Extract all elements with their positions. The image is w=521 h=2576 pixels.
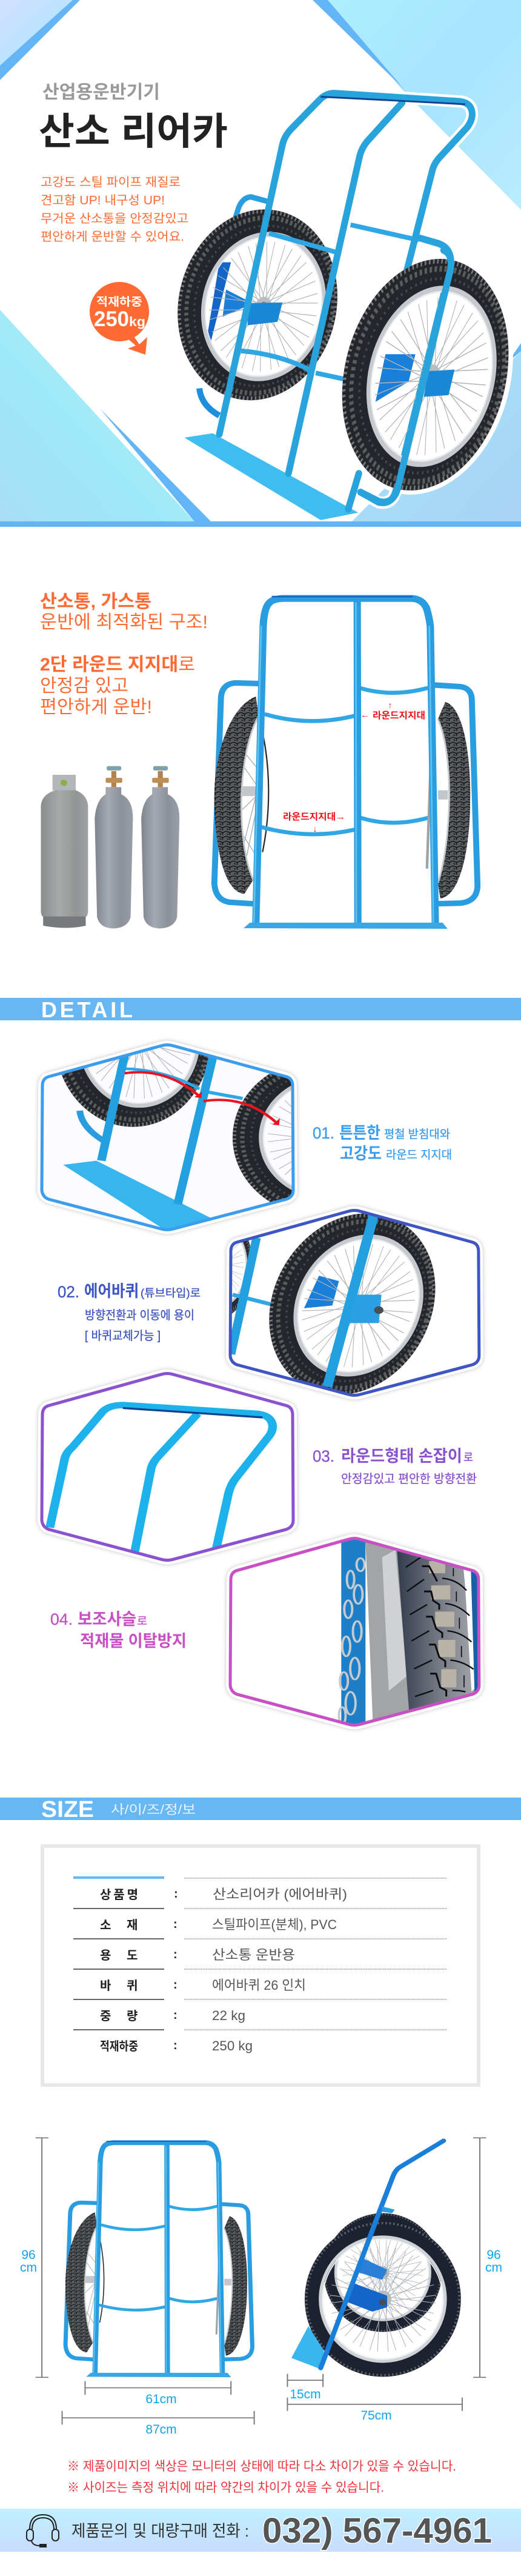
table values: 250 kg [212,2038,253,2053]
illustration: gas cylinders [41,766,179,929]
table labels: 량 [127,2009,138,2023]
heading band: SIZE [0,1797,521,1822]
callout: round support labels: ↓ [313,824,317,834]
text: detail 04: 04. [50,1610,73,1628]
text: detail 01: 튼튼한 [339,1124,380,1142]
text: optimized structure [40,592,208,717]
table labels: 용 [100,1949,111,1962]
text: optimized structure: 산소통, 가스통 [40,592,151,612]
detail panel 03 [42,1374,293,1561]
badge: load capacity 250kg: 250 [94,307,129,331]
text: detail 02: 에어바퀴 [84,1282,139,1300]
table values [212,1887,347,2053]
table values: 에어바퀴 26 인치 [212,1978,306,1993]
dimension labels: 96 [21,2248,36,2262]
table labels: 적재하중 [100,2039,138,2053]
table colons [173,1887,178,2052]
table colons: : [173,2039,178,2052]
heading band: SIZE: SIZE [41,1797,94,1822]
notes [67,2460,456,2495]
dimension labels: cm [20,2261,37,2275]
text: optimized structure: 운반에 최적화된 구조! [40,612,208,632]
table labels: 퀴 [127,1979,138,1993]
product: cart side view [291,2141,459,2375]
product: cart front dimension view [65,2141,252,2377]
table values: 산소리어카 (에어바퀴) [213,1887,347,1902]
footer: contact band: 제품문의 및 대량구매 전화 : [71,2522,249,2540]
table labels: 재 [127,1918,138,1932]
text: detail 01: 평철 받침대와 [384,1128,450,1141]
heading band: DETAIL: DETAIL [41,997,133,1022]
text: optimized structure: 안정감 있고 [40,676,128,696]
text: detail 04: 보조사슬 [78,1610,136,1628]
table labels [100,1888,138,2053]
table colons: : [173,1918,178,1931]
table labels: 중 [100,2010,111,2023]
text: detail 02: 방향전환과 이동에 용이 [85,1308,194,1322]
text: optimized structure: 편안하게 운반! [40,697,152,717]
text: detail 03: 라운드형태 손잡이 [341,1447,462,1465]
text: detail 02 [58,1282,201,1343]
detail panel 02 [224,1204,486,1402]
table colons: : [173,2009,178,2022]
panel: hero background [0,0,521,527]
text: detail 02: 02. [58,1283,79,1301]
text: detail 04: 적재물 이탈방지 [80,1632,187,1650]
badge: load capacity 250kg: 적재하중 [96,295,142,309]
text: detail 03: 안정감있고 편안한 방향전환 [341,1472,477,1486]
text: detail 01: 01. [313,1124,334,1142]
text: detail 04: 로 [137,1615,147,1627]
hero product: oxygen cart [157,93,521,520]
table labels: 도 [127,1949,138,1962]
hero description: 견고함 UP! 내구성 UP! [41,193,165,207]
hero subtitle: 산업용운반기기 [42,82,160,102]
text: detail 02: (튜브타입)로 [141,1287,201,1299]
text: detail 03: 로 [463,1451,473,1464]
text: detail 03: 03. [313,1447,334,1465]
table colons: : [173,1948,178,1961]
table values: 스틸파이프(분체), PVC [212,1917,337,1932]
table colons: : [174,1887,178,1901]
hero description: 편안하게 운반할 수 있어요. [41,230,184,244]
hero description: 고강도 스틸 파이프 재질로 [41,175,181,189]
dimension labels [20,2248,502,2437]
notes: ※ 제품이미지의 색상은 모니터의 상태에 따라 다소 차이가 있을 수 있습니다. [67,2460,456,2474]
icon: headset [27,2515,59,2547]
text: detail 03 [313,1447,477,1486]
text: optimized structure: 2단 라운드 지지대로 [40,655,195,675]
callout: round support labels: 라운드지지대→ [283,812,345,822]
text: detail 04 [50,1610,187,1650]
text: detail 01 [313,1124,452,1163]
dimension labels: 96 [486,2248,501,2262]
dimension labels: 15cm [290,2387,321,2401]
table labels: 바 [100,1979,111,1993]
hero title: 산소 리어카 [39,111,228,153]
footer: contact band: 032) 567-4961 [262,2511,492,2551]
dimension lines [36,2138,486,2424]
dimension labels: 87cm [145,2423,177,2437]
heading band: DETAIL [0,997,521,1022]
panel: specification table [42,1846,479,2085]
detail panel 01 [35,1039,299,1236]
hero description [41,175,188,244]
callout: round support labels: ↑ [388,700,393,710]
table labels: 상품명 [100,1888,138,1902]
hero description: 무거운 산소통을 안정감있고 [41,212,188,226]
text: detail 01: 라운드 지지대 [386,1148,452,1162]
table values: 산소통 운반용 [212,1947,295,1962]
table colons: : [173,1978,178,1992]
notes: ※ 사이즈는 측정 위치에 따라 약간의 차이가 있을 수 있습니다. [67,2481,384,2495]
table labels: 소 [100,1919,111,1932]
text: detail 01: 고강도 [340,1145,382,1163]
product: cart front view [214,597,477,929]
callout: round support labels: 라운드지지대 [373,711,425,721]
dimension labels: 75cm [360,2409,392,2423]
heading band: SIZE: 사/이/즈/정/보 [111,1803,196,1817]
detail panel 04 [230,1537,479,1725]
dimension labels: cm [485,2261,502,2275]
callout: round support labels: ← [360,710,369,720]
badge: load capacity 250kg [90,282,149,355]
dimension labels: 61cm [145,2392,177,2406]
footer: contact band [0,2509,521,2552]
callout: round support labels [283,700,425,834]
badge: load capacity 250kg: kg [129,314,145,329]
text: detail 02: [ 바퀴교체가능 ] [85,1329,161,1343]
table values: 22 kg [212,2008,245,2023]
